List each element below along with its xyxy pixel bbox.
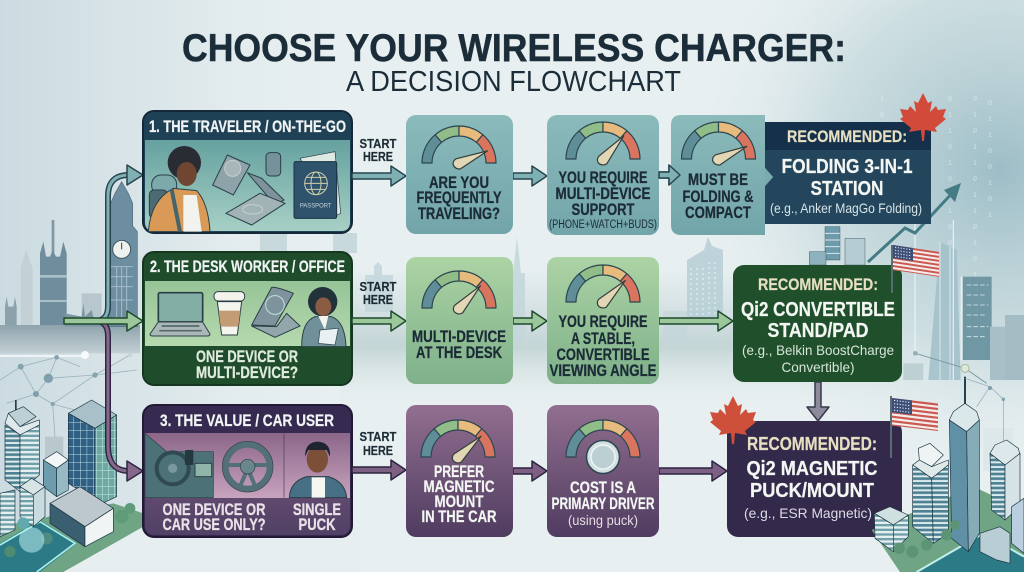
decision box: folding and compact xyxy=(671,115,773,235)
branching arrows from the start line xyxy=(64,165,143,481)
icon: US flag, desk xyxy=(891,245,939,293)
heading: traveler: 1. THE TRAVELER / ON-THE-GO xyxy=(149,118,346,136)
gauge xyxy=(682,122,756,167)
requirement text: A STABLE, xyxy=(571,329,635,348)
building xyxy=(0,400,39,537)
start here labels: HERE xyxy=(363,443,393,458)
arrow to traveler xyxy=(95,165,143,321)
gauge xyxy=(421,420,495,465)
question text: AT THE DESK xyxy=(416,343,503,362)
decision box: magnetic mount xyxy=(406,405,513,537)
question text: CAR USE ONLY? xyxy=(162,515,266,534)
illustration: laptop, coffee, stand, office worker xyxy=(150,287,346,347)
gauge with puck xyxy=(566,420,640,474)
recommendation: magnetic puck xyxy=(727,421,902,537)
single puck text: SINGLE xyxy=(293,500,341,519)
arrow to desk worker xyxy=(64,311,143,331)
arrow to value user xyxy=(95,321,143,481)
question text: IN THE CAR xyxy=(422,507,496,526)
question text xyxy=(416,173,502,223)
flow arrows: car row xyxy=(352,460,727,481)
recommendation text: (e.g., ESR Magnetic) xyxy=(744,505,872,521)
right digital rain: 0 1 1 0 1 0 1 1 0 0 1 0 1 1 0 1 1 xyxy=(946,96,954,360)
requirement text xyxy=(549,168,657,231)
recommendation text: (e.g., Anker MagGo Folding) xyxy=(770,200,922,216)
start here labels: START xyxy=(360,279,397,294)
tower xyxy=(913,443,948,543)
right digital rain: 0 1 0 1 1 0 1 1 0 1 0 1 1 0 1 xyxy=(971,96,979,328)
right far skyline xyxy=(903,220,1024,383)
requirement text: MUST BE xyxy=(688,170,748,189)
panel: traveler xyxy=(143,111,352,233)
start here labels: HERE xyxy=(363,292,393,307)
question text: PREFER xyxy=(434,462,484,481)
requirement text: VIEWING ANGLE xyxy=(550,361,656,380)
recommendation text: (e.g., Belkin BoostCharge xyxy=(742,342,894,358)
recommendation: convertible stand xyxy=(733,265,902,382)
question text xyxy=(162,500,266,534)
left isometric city xyxy=(0,400,360,572)
requirement text: COMPACT xyxy=(685,203,751,222)
decision box: stable viewing angle xyxy=(547,257,659,384)
requirement text xyxy=(682,170,754,222)
requirement text: YOU REQUIRE xyxy=(558,312,648,331)
flow arrows: traveler row xyxy=(352,165,680,186)
recommendation text: FOLDING 3-IN-1 xyxy=(782,156,912,178)
recommendation: folding station xyxy=(765,122,931,224)
building xyxy=(20,478,45,527)
flow arrows: desk row xyxy=(352,311,733,331)
requirement text: PRIMARY DRIVER xyxy=(552,494,654,513)
passport xyxy=(300,152,341,217)
single puck text xyxy=(293,500,341,534)
recommendation text: RECOMMENDED: xyxy=(758,275,878,294)
question text: ONE DEVICE OR xyxy=(196,347,298,366)
requirement text: COST IS A xyxy=(570,478,636,497)
question text: MULTI-DEVICE? xyxy=(196,363,298,382)
arrow into box: repeat on top of the compact box xyxy=(659,165,680,185)
right isometric city xyxy=(872,377,1024,572)
requirement text: SUPPORT xyxy=(572,200,635,219)
recommendation text xyxy=(741,275,895,375)
building xyxy=(68,400,117,507)
question text xyxy=(422,462,496,526)
question text: MOUNT xyxy=(434,492,484,511)
recommendation text: Convertible) xyxy=(782,359,854,375)
decision box: multi-device at desk xyxy=(406,257,513,384)
panel: value car user xyxy=(143,405,352,537)
recommendation text: RECOMMENDED: xyxy=(747,434,877,454)
recommendation text: STAND/PAD xyxy=(768,320,868,342)
left London skyline xyxy=(0,182,140,463)
right digital rain xyxy=(878,96,994,360)
recommendation text: RECOMMENDED: xyxy=(787,127,907,146)
question text: MAGNETIC xyxy=(424,477,494,496)
recommendation text: PUCK/MOUNT xyxy=(750,480,874,502)
requirement text: YOU REQUIRE xyxy=(558,168,648,187)
question text: ONE DEVICE OR xyxy=(162,500,266,519)
illustration: traveler with charger and passport xyxy=(148,146,341,232)
tower xyxy=(990,440,1020,520)
gauge xyxy=(566,265,640,311)
right digital rain: 0 1 1 0 0 1 0 1 xyxy=(986,100,994,220)
requirement text: MULTI-DEVICE xyxy=(556,184,650,203)
single puck text: PUCK xyxy=(298,515,336,534)
building xyxy=(43,452,68,497)
recommendation text: STATION xyxy=(810,178,884,200)
recommendation text: Qi2 CONVERTIBLE xyxy=(741,299,895,321)
icon: Canadian maple leaf, value xyxy=(710,396,756,444)
illustration: traveler with charger and passport: PASSPORT xyxy=(300,202,332,209)
question text: TRAVELING? xyxy=(418,204,500,223)
small towers above desk recommendation xyxy=(809,227,865,265)
building xyxy=(50,487,113,547)
charger xyxy=(213,155,250,195)
recommendation text: Qi2 MAGNETIC xyxy=(746,458,878,480)
illustration: car interior, wheel, driver xyxy=(145,433,347,498)
requirement text: (PHONE+WATCH+BUDS) xyxy=(549,219,657,231)
panel: desk worker xyxy=(143,252,352,385)
requirement text: CONVERTIBLE xyxy=(556,345,650,364)
heading: desk worker: 2. THE DESK WORKER / OFFICE xyxy=(150,258,345,276)
arrow: desk recommendation to puck xyxy=(807,382,829,421)
Big Ben xyxy=(106,182,137,327)
requirement text: FOLDING & xyxy=(682,187,754,206)
icon: US flag, value xyxy=(890,396,938,458)
gauge xyxy=(422,271,496,317)
recommendation text xyxy=(770,127,922,216)
decision box: frequently traveling xyxy=(406,115,513,234)
question text: ARE YOU xyxy=(429,173,489,192)
question text xyxy=(412,327,506,362)
gauge xyxy=(422,126,496,171)
right digital rain: 1 0 1 1 0 0 xyxy=(878,96,886,184)
start here labels: HERE xyxy=(363,149,393,164)
recommendation text xyxy=(744,434,878,521)
decision box: cost driver xyxy=(547,405,659,537)
requirement text xyxy=(552,478,654,528)
requirement text xyxy=(550,312,656,380)
title: CHOOSE YOUR WIRELESS CHARGER: xyxy=(182,27,846,70)
faint buildings behind flowchart xyxy=(260,233,723,343)
tower xyxy=(949,403,979,552)
start here labels xyxy=(360,136,397,458)
subtitle: A DECISION FLOWCHART xyxy=(346,66,681,98)
growth arrow xyxy=(868,183,961,262)
gauge xyxy=(566,122,640,167)
requirement text: (using puck) xyxy=(568,512,638,528)
start here labels: START xyxy=(360,136,397,151)
decision box: multi-device support xyxy=(547,115,659,235)
heading: value car user: 3. THE VALUE / CAR USER xyxy=(160,412,334,430)
right digital rain: 1 0 0 1 1 xyxy=(918,96,926,168)
icon: Canadian maple leaf, traveler xyxy=(900,93,946,141)
question text: FREQUENTLY xyxy=(416,188,502,207)
question text: MULTI-DEVICE xyxy=(412,327,506,346)
tower xyxy=(874,507,908,552)
question text xyxy=(196,347,298,382)
start here labels: START xyxy=(360,429,397,444)
